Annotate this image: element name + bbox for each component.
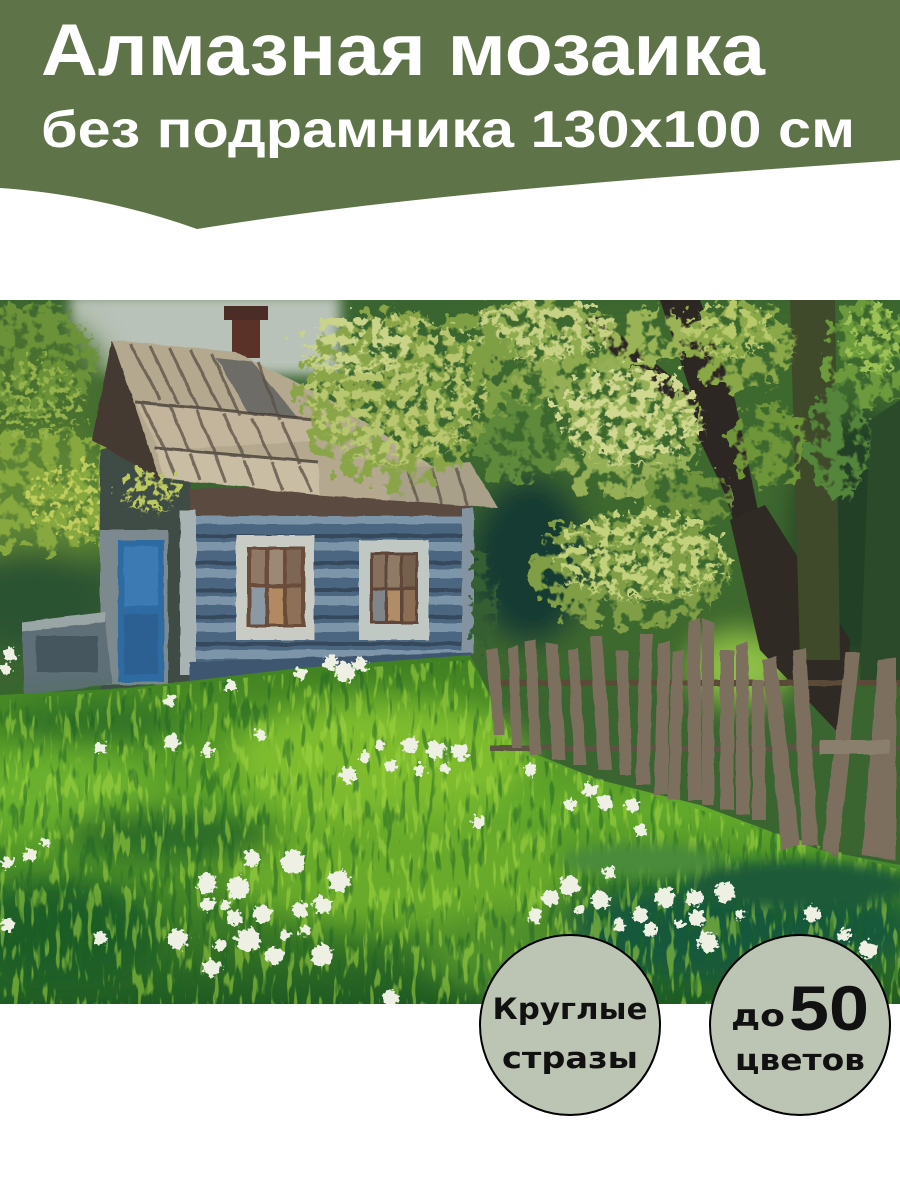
roof (92, 340, 498, 508)
badge: up to 50 colours: до (731, 999, 785, 1034)
left tree foliage (0, 300, 118, 652)
badge: round rhinestones: стразы (502, 1041, 638, 1075)
badge: up to 50 colours (710, 935, 890, 1115)
title line 1: Алмазная мозаика (41, 10, 767, 91)
white daisies (0, 648, 877, 1006)
right background trees (473, 407, 882, 722)
title line 2: без подрамника 130x100 см (41, 101, 855, 159)
porch (22, 612, 112, 696)
badge: up to 50 colours: 50 (789, 974, 869, 1044)
grass meadow (0, 655, 900, 1004)
badge: up to 50 colours: цветов (735, 1043, 865, 1077)
fence (486, 618, 900, 860)
window right (359, 540, 429, 640)
dark shrubs under fence (560, 844, 900, 909)
window left (236, 535, 314, 640)
sky (70, 295, 340, 375)
banner: green ribbon header (0, 0, 900, 229)
chimney (224, 306, 268, 358)
house (22, 340, 498, 696)
tree trunks (566, 300, 900, 740)
background base (0, 300, 900, 865)
badge: round rhinestones (480, 935, 660, 1115)
badge: round rhinestones: Круглые (492, 992, 648, 1026)
painting: country house in a garden (0, 295, 900, 1006)
foliage over roof (122, 312, 520, 650)
tree canopy (450, 300, 900, 630)
door (100, 530, 168, 685)
house wall (100, 430, 474, 690)
